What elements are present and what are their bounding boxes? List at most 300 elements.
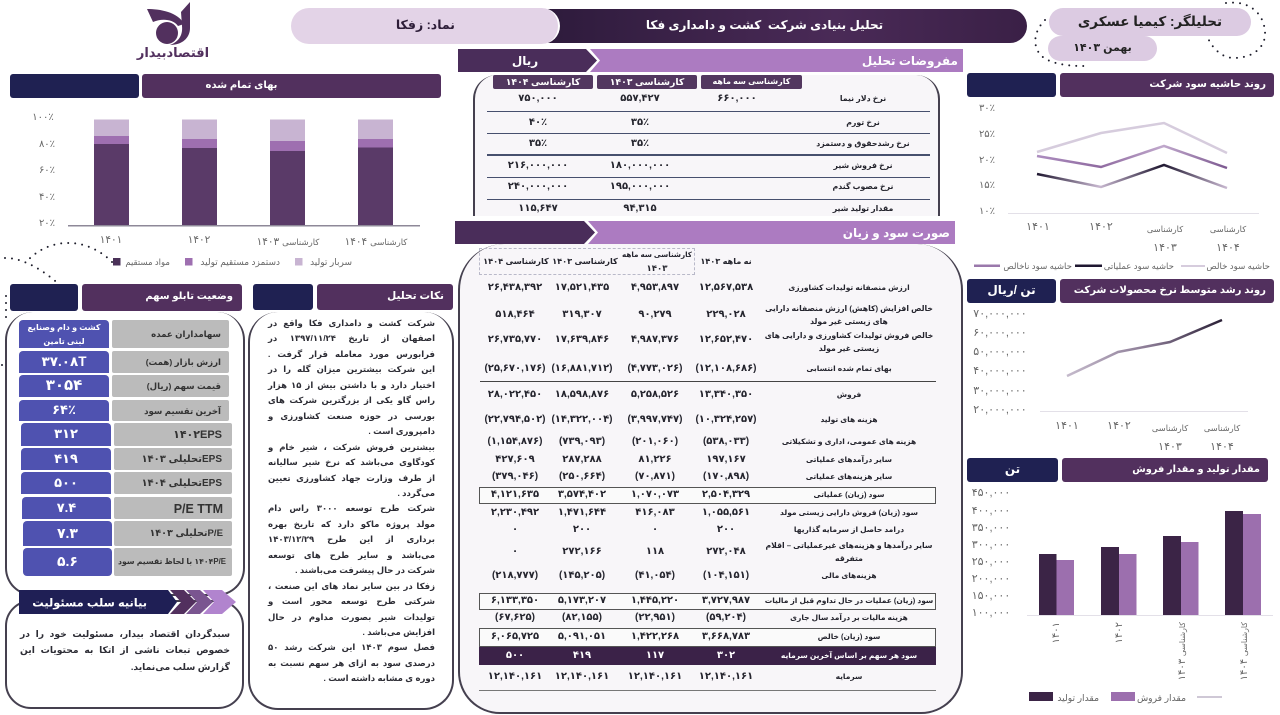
row: (۱۲,۱۰۸,۶۸۶) bbox=[695, 363, 757, 374]
analysis notes text: فرابورس مورد معامله قرار گرفت . bbox=[268, 349, 435, 359]
row bbox=[484, 414, 878, 425]
row: ۰ bbox=[652, 524, 658, 535]
analysis notes text: شرکت در حال پیشرفت می‌باشند . bbox=[295, 565, 435, 575]
row: ۳,۷۲۷,۹۸۷ bbox=[702, 595, 750, 606]
row: ۱۹۷,۱۶۷ bbox=[706, 454, 746, 465]
analysis notes text: بورسی در حوزه صنعت کشاورزی و bbox=[268, 411, 435, 421]
analysis notes text: دوره ی مشابه داشته است . bbox=[324, 673, 435, 683]
section header: analysis notes bbox=[253, 284, 453, 310]
row: sales: فروش bbox=[837, 390, 861, 399]
line chart: profit margins: ۱۰٪ bbox=[979, 206, 995, 217]
row: (۶۷,۶۲۵) bbox=[495, 612, 535, 623]
row: (۲۱۸,۷۷۷) bbox=[492, 570, 538, 581]
disclaimer text bbox=[20, 628, 230, 672]
market cap row: ارزش بازار (همت) bbox=[146, 357, 221, 367]
analysis notes text: بیشترین فروش شرکت ، شیر خام و bbox=[268, 442, 435, 452]
P/E 1403 row: ۷.۳ bbox=[57, 525, 78, 541]
row: (۳,۹۹۷,۷۴۷) bbox=[628, 414, 682, 425]
EPS 1402 row bbox=[21, 423, 232, 446]
row: ۱۲,۶۵۲,۴۷۰ bbox=[699, 334, 753, 345]
line chart: product price: ۱۴۰۳ bbox=[1158, 441, 1182, 453]
row: متفرقه bbox=[835, 554, 863, 563]
row: milk price: ۲۱۶,۰۰۰,۰۰۰ bbox=[508, 160, 568, 171]
line chart: product price: ۴۰,۰۰۰,۰۰۰ bbox=[973, 365, 1027, 377]
row: exchange rate bbox=[518, 93, 886, 104]
analysis notes text: افزایش می‌باشد . bbox=[362, 627, 435, 637]
row: wage growth: ۳۵٪ bbox=[631, 138, 649, 149]
disclaimer banner bbox=[19, 590, 236, 614]
row: سود (زیان) عملیات در حال تداوم قبل از مالیات bbox=[765, 596, 933, 605]
analysis notes text bbox=[268, 318, 435, 683]
logo: اقتصاد بیدار bbox=[136, 2, 209, 60]
highlighted row: earnings per share bbox=[479, 647, 936, 665]
line chart: profit margins: حاشیه سود ناخالص bbox=[1003, 261, 1072, 271]
row: ۶,۱۳۳,۳۵۰ bbox=[491, 595, 539, 606]
bar chart: production and sales: ۴۰۰,۰۰۰ bbox=[972, 505, 1010, 517]
section header: production and sales: تن bbox=[1005, 462, 1020, 476]
date pill: بهمن ۱۴۰۳ bbox=[1073, 42, 1132, 54]
analysis notes text: شرکت طرح توسعه ۳۰۰۰ راس دام bbox=[268, 503, 435, 513]
row: (۱۴,۳۲۲,۰۰۴) bbox=[551, 414, 613, 425]
EPS 1402 row: ۱۴۰۲EPS bbox=[173, 429, 222, 441]
section header: price growth: روند رشد متوسط نرخ محصولات شرکت bbox=[1074, 285, 1266, 296]
row bbox=[0, 522, 1280, 538]
row: سود (زیان) خالص bbox=[818, 632, 880, 641]
line chart: product price: ۷۰,۰۰۰,۰۰۰ bbox=[973, 308, 1027, 320]
row: capital: ۱۲,۱۴۰,۱۶۱ bbox=[488, 671, 542, 682]
row: milk production: ۱۱۵,۶۴۷ bbox=[518, 203, 558, 214]
column headings: ۱۴۰۳ bbox=[646, 262, 667, 272]
row: (۲۲,۹۵۱) bbox=[635, 612, 675, 623]
line chart: product price: ۶۰,۰۰۰,۰۰۰ bbox=[973, 327, 1027, 339]
column heading: quarter: کارشناسی سه ماهه bbox=[713, 77, 790, 86]
analysis notes text: اختیار دارد و با داشتن بیش از ۱۵ هزار bbox=[268, 380, 435, 390]
section header: production and sales: مقدار تولید و مقدار فروش bbox=[1132, 464, 1260, 475]
row: milk production: مقدار تولید شیر bbox=[833, 204, 893, 213]
row: (۸۲,۱۵۵) bbox=[562, 612, 602, 623]
row: (۱۶,۸۸۱,۷۱۲) bbox=[551, 363, 613, 374]
EPS 1403 row: EPSتحلیلی ۱۴۰۳ bbox=[141, 454, 222, 465]
income statement table bbox=[479, 248, 936, 691]
section header: profit margins bbox=[967, 73, 1274, 97]
analyst pill bbox=[1049, 8, 1251, 36]
line chart: profit margins bbox=[970, 100, 1276, 272]
row: ۴۱۶,۰۸۳ bbox=[635, 507, 675, 518]
row: (۲۰۱,۰۶۰) bbox=[632, 436, 678, 447]
analysis notes text: اصفهان از تاریخ ۱۳۹۷/۱۱/۲۴ در bbox=[268, 333, 435, 343]
dividend row: آخرین تقسیم سود bbox=[144, 406, 221, 416]
row: ۱۷,۵۲۱,۴۳۵ bbox=[555, 282, 609, 293]
section header: income statement: صورت سود و زیان bbox=[843, 226, 950, 241]
row: ۴,۹۸۷,۳۷۶ bbox=[631, 334, 679, 345]
row: capital: ۱۲,۱۴۰,۱۶۱ bbox=[699, 671, 753, 682]
row: ۳۱۹,۳۰۷ bbox=[562, 309, 602, 320]
analysis notes text: شرکتی طرح توسعه محور است و bbox=[268, 596, 435, 606]
row bbox=[0, 568, 1280, 584]
dividend row: ۶۴٪ bbox=[52, 402, 76, 417]
stacked bar chart: cost of goods: سربار تولید bbox=[310, 257, 352, 267]
row bbox=[0, 629, 1280, 645]
section header: assumptions bbox=[458, 49, 963, 72]
row: های زیستی غیر مولد bbox=[810, 317, 888, 326]
bar chart: production and sales: ۱۵۰,۰۰۰ bbox=[972, 590, 1010, 602]
analyst pill: تحلیلگر: کیمیا عسکری bbox=[1078, 14, 1222, 29]
analysis notes text: درصدی سود به ازای هر سهم نسبت به bbox=[268, 658, 435, 668]
row: ۵,۱۷۳,۲۰۷ bbox=[558, 595, 606, 606]
stacked bar chart: cost of goods bbox=[32, 112, 420, 268]
row: ۲,۲۳۰,۴۹۲ bbox=[491, 507, 539, 518]
row: ۴,۱۲۱,۶۳۵ bbox=[491, 489, 539, 500]
P/E 1403 row: P/Eتحلیلی ۱۴۰۳ bbox=[149, 528, 223, 539]
column heading: quarter bbox=[701, 75, 802, 89]
bar chart: production and sales: ۲۰۰,۰۰۰ bbox=[972, 573, 1010, 585]
stacked bar chart: cost of goods: مواد مستقیم bbox=[125, 257, 170, 268]
stacked bar chart: cost of goods: ۶۰٪ bbox=[39, 165, 55, 176]
row: (۲۵۰,۶۶۴) bbox=[559, 471, 605, 482]
row: سود هر سهم بر اساس آخرین سرمایه bbox=[781, 651, 917, 660]
analysis notes text: راس گاو یکی از بزرگترین شرکت های bbox=[268, 395, 435, 405]
line chart: product price: ۱۴۰۱ bbox=[1055, 420, 1079, 432]
panel: board table bbox=[5, 312, 245, 596]
row bbox=[488, 331, 933, 353]
analysis notes text: این شرکت بیشترین میزان گله را در bbox=[268, 364, 435, 374]
market cap row bbox=[19, 351, 229, 373]
row: (۱۰,۳۲۴,۲۵۷) bbox=[695, 414, 757, 425]
panel: assumptions table background bbox=[473, 75, 940, 216]
disclaimer text: گزارش سلب می‌نماید. bbox=[131, 662, 230, 672]
row: exchange rate: ۶۶۰,۰۰۰ bbox=[717, 93, 757, 104]
line chart: profit margins: ۱۴۰۱ bbox=[1026, 221, 1050, 233]
row: milk price: ۱۸۰,۰۰۰,۰۰۰ bbox=[610, 160, 670, 171]
section header: board status bbox=[10, 284, 242, 311]
section header: cost structure: بهای تمام شده bbox=[206, 80, 277, 91]
line chart: product price: ۵۰,۰۰۰,۰۰۰ bbox=[973, 346, 1027, 358]
analysis notes text: فصل سوم ۱۴۰۳ این شرکت رشد ۵۰ bbox=[268, 642, 435, 652]
row: سایر درآمدهای عملیاتی bbox=[806, 455, 892, 464]
row: ۰ bbox=[512, 524, 518, 535]
row: (۷۳۹,۰۹۳) bbox=[559, 436, 605, 447]
row: milk price: نرخ فروش شیر bbox=[834, 161, 892, 170]
row: بهای تمام شده انتسابی bbox=[806, 364, 892, 373]
column heading: 1403 bbox=[597, 75, 697, 89]
section header: price growth bbox=[967, 279, 1274, 303]
row: wage growth: ۳۵٪ bbox=[529, 138, 547, 149]
row: wheat price: نرخ مصوب گندم bbox=[833, 182, 893, 191]
EPS 1402 row: ۳۱۲ bbox=[54, 426, 78, 441]
line chart: profit margins: ۱۴۰۴ bbox=[1216, 242, 1240, 254]
row: (۵۹,۲۰۴) bbox=[706, 612, 746, 623]
column heading: nine months: نه ماهه ۱۴۰۳ bbox=[700, 257, 752, 266]
panel: income statement background bbox=[458, 244, 963, 714]
column headings: کارشناسی ۱۴۰۴ bbox=[483, 257, 549, 266]
row: هزینه‌های مالی bbox=[821, 571, 877, 580]
line chart: product price: ۱۴۰۴ bbox=[1210, 441, 1234, 453]
row: ۹۰,۲۷۹ bbox=[638, 309, 672, 320]
line chart: product price bbox=[970, 306, 1260, 452]
price row: قیمت سهم (ریال) bbox=[147, 381, 221, 391]
section header: cost structure bbox=[10, 74, 441, 98]
row: (۲۲,۷۹۴,۵۰۲) bbox=[484, 414, 546, 425]
panel: disclaimer bbox=[5, 600, 244, 709]
row bbox=[0, 593, 1280, 609]
bar chart: production and sales: ۳۵۰,۰۰۰ bbox=[972, 522, 1010, 534]
panel: analysis notes bbox=[248, 312, 454, 710]
row bbox=[484, 363, 892, 374]
row bbox=[488, 436, 916, 447]
line chart: profit margins: ۱۴۰۳ bbox=[1153, 242, 1177, 254]
row: wage growth bbox=[529, 138, 910, 149]
row: (۷۰,۸۷۱) bbox=[635, 471, 675, 482]
row: (۱,۱۵۴,۸۷۶) bbox=[488, 436, 542, 447]
highlight box: pre-tax profit bbox=[479, 593, 936, 610]
row: ۱,۰۷۰,۰۷۳ bbox=[631, 489, 679, 500]
stacked bar chart: cost of goods: ۸۰٪ bbox=[39, 139, 55, 150]
section header: assumptions: ریال bbox=[512, 54, 538, 68]
analysis notes text: مولد پروژه ماکو دارد که تاریخ بهره bbox=[268, 519, 435, 529]
analysis notes text: زفکا در بین سایر نماد های این صنعت ، bbox=[268, 581, 435, 591]
row: ۲۸۷,۲۸۸ bbox=[562, 454, 602, 465]
row: سایر درآمدها و هزینه‌های غیرعملیاتی – اقلام bbox=[765, 541, 932, 550]
stacked bar chart: cost of goods: ۴۰٪ bbox=[39, 192, 55, 203]
section header: production and sales bbox=[967, 458, 1268, 482]
row: ۱,۴۷۱,۶۴۴ bbox=[558, 507, 606, 518]
row: capital: سرمایه bbox=[836, 672, 862, 681]
line chart: profit margins: حاشیه سود عملیاتی bbox=[1104, 261, 1174, 271]
EPS 1404 row: EPSتحلیلی ۱۴۰۴ bbox=[141, 478, 222, 489]
row: wage growth: نرخ رشدحقوق و دستمزد bbox=[816, 139, 910, 148]
row: خالص فروش تولیدات کشاورزی و دارایی های bbox=[765, 331, 933, 340]
bar chart: production and sales: کارشناسی ۱۴۰۳ bbox=[1177, 622, 1188, 680]
row: ۳۰۲ bbox=[717, 650, 735, 661]
row: ۳,۶۶۸,۷۸۳ bbox=[702, 631, 750, 642]
row: ۱۷,۶۳۹,۸۴۶ bbox=[555, 334, 609, 345]
row: capital: ۱۲,۱۴۰,۱۶۱ bbox=[628, 671, 682, 682]
row bbox=[0, 505, 1280, 521]
bar chart: production and sales: مقدار فروش bbox=[1137, 693, 1186, 703]
line chart: profit margins: ۱۵٪ bbox=[979, 180, 995, 191]
row bbox=[0, 544, 1280, 560]
line chart: profit margins: ۲۵٪ bbox=[979, 129, 995, 140]
EPS 1403 row bbox=[21, 448, 232, 470]
row: هزینه مالیات بر درآمد سال جاری bbox=[790, 613, 908, 622]
line chart: profit margins: کارشناسی bbox=[1147, 224, 1183, 234]
bar chart: production and sales: مقدار تولید bbox=[1057, 693, 1099, 703]
bar chart: production and sales: ۱۴۰۲ bbox=[1114, 622, 1125, 643]
row: sales: ۱۳,۳۴۰,۳۵۰ bbox=[699, 389, 753, 400]
row: ۱,۴۲۲,۲۶۸ bbox=[631, 631, 679, 642]
P/E 1404 row: ۱۴۰۴P/E با لحاظ تقسیم سود bbox=[118, 557, 226, 566]
row: (۴,۷۷۳,۰۲۶) bbox=[628, 363, 682, 374]
column heading: 1404 bbox=[493, 75, 593, 89]
price row: ۳۰۵۴ bbox=[46, 377, 82, 394]
stacked bar chart: cost of goods: کارشناسی ۱۴۰۳ bbox=[257, 236, 320, 248]
row bbox=[0, 648, 1280, 664]
stacked bar chart: cost of goods: دستمزد مستقیم تولید bbox=[200, 257, 280, 268]
bar chart: production and sales: ۲۵۰,۰۰۰ bbox=[972, 556, 1010, 568]
row: ۲۲۹,۰۲۸ bbox=[706, 309, 746, 320]
row: ۲۶,۷۳۵,۷۷۰ bbox=[488, 334, 542, 345]
assumptions table bbox=[487, 75, 930, 214]
analysis notes text: دامپروری است . bbox=[368, 426, 435, 436]
market cap row: ۳۷.۰۸T bbox=[42, 354, 86, 369]
section header: price growth: تن /ریال bbox=[987, 283, 1036, 297]
row: ۲۰۰ bbox=[573, 524, 591, 535]
row bbox=[492, 471, 892, 482]
row: ۲۷۲,۰۴۸ bbox=[706, 546, 746, 557]
row: ۴۱۹ bbox=[573, 650, 591, 661]
line chart: profit margins: کارشناسی bbox=[1210, 224, 1246, 234]
row: هزینه های تولید bbox=[820, 415, 878, 424]
row: ۲۰۰ bbox=[717, 524, 735, 535]
stacked bar chart: cost of goods: ۱۴۰۱ bbox=[100, 234, 122, 246]
row: milk price bbox=[508, 160, 892, 171]
income statement table: زیستی غیر مولد bbox=[819, 344, 879, 353]
stacked bar chart: cost of goods: ۱۴۰۲ bbox=[188, 234, 211, 246]
P/E 1404 row: ۵.۶ bbox=[57, 553, 78, 569]
column heading: 1404: کارشناسی ۱۴۰۴ bbox=[506, 77, 580, 87]
row: sales: ۲۸,۰۲۲,۴۵۰ bbox=[488, 389, 542, 400]
row: capital bbox=[0, 669, 1280, 685]
row: سود (زیان) فروش دارایی زیستی مولد bbox=[780, 508, 918, 517]
column headings: کارشناسی ۱۴۰۳ bbox=[552, 257, 618, 266]
main title bar bbox=[548, 9, 1027, 43]
row bbox=[495, 304, 933, 326]
row: (۴۱,۰۵۴) bbox=[635, 570, 675, 581]
row: milk production bbox=[518, 203, 893, 214]
line chart: product price: کارشناسی bbox=[1152, 423, 1188, 433]
row bbox=[495, 454, 892, 465]
row: (۵۳۸,۰۳۳) bbox=[703, 436, 749, 447]
line chart: profit margins: ۱۴۰۲ bbox=[1089, 221, 1113, 233]
row: ۴,۹۵۳,۸۹۷ bbox=[631, 282, 679, 293]
row: ۵۰۰ bbox=[506, 650, 524, 661]
row: ۲۶,۴۳۸,۳۹۲ bbox=[488, 282, 542, 293]
row: ۱,۴۴۵,۲۲۰ bbox=[631, 595, 679, 606]
row: wheat price: ۱۹۵,۰۰۰,۰۰۰ bbox=[610, 181, 670, 192]
row: wheat price: ۲۴۰,۰۰۰,۰۰۰ bbox=[508, 181, 568, 192]
row: ۸۱,۲۲۶ bbox=[638, 454, 672, 465]
section header: profit margins: روند حاشیه سود شرکت bbox=[1149, 79, 1266, 90]
line chart: product price: ۳۰,۰۰۰,۰۰۰ bbox=[973, 385, 1027, 397]
major shareholder row bbox=[19, 320, 229, 348]
stacked bar chart: cost of goods: ۱۰۰٪ bbox=[32, 112, 54, 123]
analysis notes text: تولیدات شیر بصورت مداوم در حال bbox=[268, 612, 435, 622]
column headings: کارشناسی سه ماهه bbox=[622, 250, 692, 259]
row: milk production: ۹۴,۳۱۵ bbox=[623, 203, 657, 214]
row: (۱۷۰,۸۹۸) bbox=[703, 471, 749, 482]
section header: assumptions: مفروضات تحلیل bbox=[862, 54, 958, 69]
highlight box: operating profit bbox=[479, 487, 936, 504]
analysis notes text: می‌باشد و سایر طرح های توسعه bbox=[268, 550, 435, 560]
row: inflation: نرخ تورم bbox=[846, 118, 880, 127]
row: ۵۱۸,۴۶۴ bbox=[495, 309, 535, 320]
bar chart: production and sales bbox=[970, 484, 1276, 706]
line chart: profit margins: ۳۰٪ bbox=[979, 103, 995, 114]
bar chart: production and sales: ۴۵۰,۰۰۰ bbox=[972, 487, 1010, 499]
row: ۱,۰۵۵,۵۶۱ bbox=[702, 507, 750, 518]
main title bar: تحلیل بنیادی شرکت کشت و دامداری فکا bbox=[646, 18, 883, 32]
row: (۲۵,۶۷۰,۱۷۶) bbox=[484, 363, 546, 374]
disclaimer text: خصوص تبعات ناشی از اتکا به محتویات این bbox=[20, 645, 230, 655]
row: sales bbox=[488, 389, 861, 400]
analysis notes text: می‌گردد . bbox=[397, 488, 435, 498]
row: exchange rate: ۷۵۰,۰۰۰ bbox=[518, 93, 558, 104]
major shareholder row: سهامداران عمده bbox=[151, 329, 221, 339]
row: ۲۷۲,۱۶۶ bbox=[562, 546, 602, 557]
row: wheat price bbox=[508, 181, 893, 192]
line chart: profit margins: حاشیه سود خالص bbox=[1206, 261, 1270, 271]
row: ۵,۰۹۱,۰۵۱ bbox=[558, 631, 606, 642]
row bbox=[0, 610, 1280, 626]
ticker pill: نماد: زفکا bbox=[396, 18, 455, 32]
P/E 1404 row bbox=[23, 548, 232, 576]
row: ۶,۰۶۵,۷۲۵ bbox=[491, 631, 539, 642]
bar chart: production and sales: ۳۰۰,۰۰۰ bbox=[972, 539, 1010, 551]
row: capital: ۱۲,۱۴۰,۱۶۱ bbox=[555, 671, 609, 682]
line chart: product price: کارشناسی bbox=[1204, 423, 1240, 433]
row: (۳۷۹,۰۴۶) bbox=[492, 471, 538, 482]
row: (۱۴۵,۲۰۵) bbox=[559, 570, 605, 581]
row: ۴۲۷,۶۰۹ bbox=[495, 454, 535, 465]
analysis notes text: از طرف وزارت جهاد کشاورزی تعیین bbox=[268, 472, 435, 482]
price row bbox=[19, 375, 229, 397]
row bbox=[488, 282, 910, 293]
ticker pill bbox=[291, 8, 560, 44]
disclaimer banner: بیانیه سلب مسئولیت bbox=[32, 598, 147, 610]
analysis notes text: شرکت کشت و دامداری فکا واقع در bbox=[268, 318, 435, 328]
row: ۰ bbox=[512, 546, 518, 557]
row: (۱۰۴,۱۵۱) bbox=[703, 570, 749, 581]
row: sales: ۵,۲۵۸,۵۲۶ bbox=[631, 389, 679, 400]
section header: analysis notes: نکات تحلیل bbox=[387, 290, 444, 302]
row: خالص افزایش (کاهش) ارزش منصفانه دارایی bbox=[765, 304, 933, 313]
stacked bar chart: cost of goods: کارشناسی ۱۴۰۴ bbox=[345, 236, 408, 248]
bar chart: production and sales: کارشناسی ۱۴۰۴ bbox=[1239, 622, 1250, 680]
row: هزینه های عمومی، اداری و تشکیلاتی bbox=[782, 437, 916, 446]
logo: اقتصاد بیدار: اقتصادبیدار bbox=[136, 45, 209, 60]
P/E TTM row: ۷.۴ bbox=[57, 500, 76, 515]
row: inflation bbox=[529, 117, 880, 128]
column heading: 1403: کارشناسی ۱۴۰۳ bbox=[610, 77, 684, 87]
row: ارزش منصفانه تولیدات کشاورزی bbox=[788, 283, 910, 292]
row: inflation: ۴۰٪ bbox=[529, 117, 547, 128]
EPS 1403 row: ۴۱۹ bbox=[54, 451, 78, 466]
row: sales: ۱۸,۵۹۸,۸۷۶ bbox=[555, 389, 609, 400]
row: درامد حاصل از سرمایه گذاریها bbox=[794, 525, 904, 534]
row: ۱۱۷ bbox=[646, 650, 664, 661]
row: ۲,۵۰۴,۳۲۹ bbox=[702, 489, 750, 500]
disclaimer text: سبدگردان اقتصاد بیدار، مسئولیت خود را در bbox=[20, 629, 230, 639]
highlight box: net profit bbox=[479, 628, 936, 647]
row bbox=[491, 489, 884, 500]
dividend row bbox=[19, 400, 229, 421]
EPS 1404 row: ۵۰۰ bbox=[54, 475, 78, 490]
row: ۳,۵۷۴,۴۰۲ bbox=[558, 489, 606, 500]
line chart: product price: ۲۰,۰۰۰,۰۰۰ bbox=[973, 404, 1027, 416]
P/E 1403 row bbox=[23, 521, 232, 546]
row: exchange rate: نرخ دلار نیما bbox=[840, 94, 886, 103]
row: inflation: ۳۵٪ bbox=[631, 117, 649, 128]
section header: income statement bbox=[455, 221, 955, 244]
stacked bar chart: cost of goods: ۲۰٪ bbox=[39, 218, 55, 229]
row: ۱۲,۵۶۷,۵۳۸ bbox=[699, 282, 753, 293]
EPS 1404 row bbox=[21, 472, 232, 494]
analysis notes text: کودگاوی می‌باشد که نرخ شیر سالیانه bbox=[268, 457, 435, 467]
column headings bbox=[479, 248, 695, 275]
P/E TTM row bbox=[22, 497, 232, 519]
major shareholder row: کشت و دام وصنایع لبنی تامین bbox=[27, 323, 101, 346]
bar chart: production and sales: ۱۰۰,۰۰۰ bbox=[972, 607, 1010, 619]
